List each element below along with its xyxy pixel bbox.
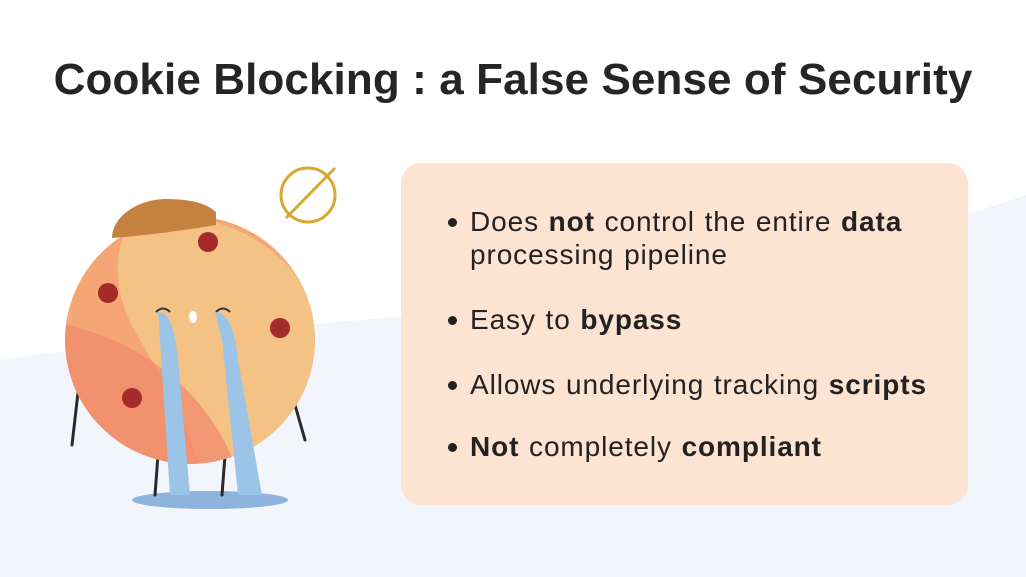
chips: [98, 232, 290, 408]
bullet 3: Allows underlying tracking scripts: [470, 369, 927, 400]
hat: [112, 199, 216, 238]
tears: [158, 312, 190, 495]
panel: drawbacks list: [401, 163, 968, 505]
illustration: crying cookie: [65, 166, 336, 509]
title: Cookie Blocking : a False Sense of Security: [54, 55, 972, 104]
shadow puddle: [132, 491, 288, 509]
icon: no symbol: [281, 168, 335, 222]
legs and arms: [72, 340, 305, 495]
bullet 4: Not completely compliant: [470, 431, 822, 462]
bullet 1: Does not control the entire data processing pipeline: [470, 206, 902, 270]
face: [156, 308, 230, 312]
body: [65, 218, 315, 464]
bullet 2: Easy to bypass: [470, 304, 682, 335]
